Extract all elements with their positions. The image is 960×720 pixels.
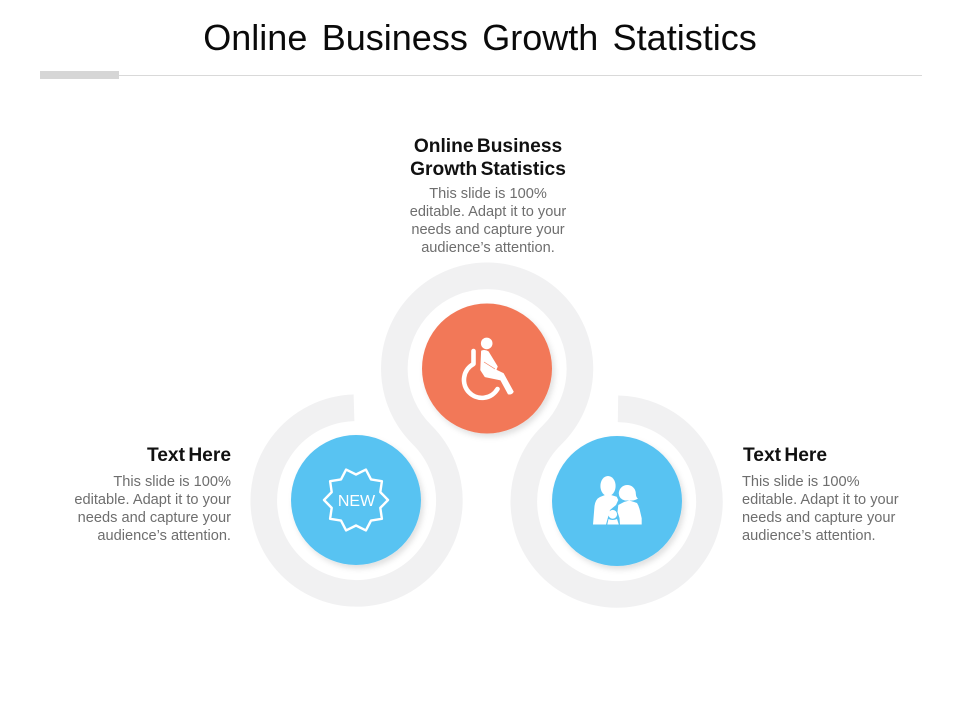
title: Online Business Growth Statistics — [203, 17, 757, 58]
text: right: audience’s attention. — [742, 528, 876, 544]
connected ring band — [264, 276, 709, 594]
circle: top orange — [422, 304, 552, 434]
text: top: needs and capture your — [411, 222, 565, 238]
heading: left: Text Here — [147, 445, 231, 466]
heading: top: Growth Statistics — [410, 159, 566, 180]
text: top: This slide is 100% — [429, 186, 547, 202]
text: left — [74, 474, 231, 544]
icon: family — [593, 476, 642, 524]
text: right — [742, 474, 899, 544]
text: left: audience’s attention. — [97, 528, 231, 544]
circle: right blue — [552, 436, 682, 566]
text: left: This slide is 100% — [113, 474, 231, 490]
text: right: editable. Adapt it to your — [742, 492, 899, 508]
text: top: audience’s attention. — [421, 240, 555, 256]
icon: new badge — [324, 470, 388, 530]
circle: left blue — [291, 435, 421, 565]
text: left: editable. Adapt it to your — [74, 492, 231, 508]
text: right: This slide is 100% — [742, 474, 860, 490]
text: top — [410, 186, 566, 256]
text: right: needs and capture your — [742, 510, 895, 526]
icon: wheelchair — [464, 338, 513, 398]
heading: right: Text Here — [743, 445, 827, 466]
text: top: editable. Adapt it to your — [410, 204, 566, 220]
title underline — [40, 71, 922, 79]
heading: top: Online Business — [414, 136, 562, 157]
heading: top — [410, 136, 566, 180]
text: left: needs and capture your — [78, 510, 231, 526]
icon: new badge: NEW — [338, 493, 376, 510]
